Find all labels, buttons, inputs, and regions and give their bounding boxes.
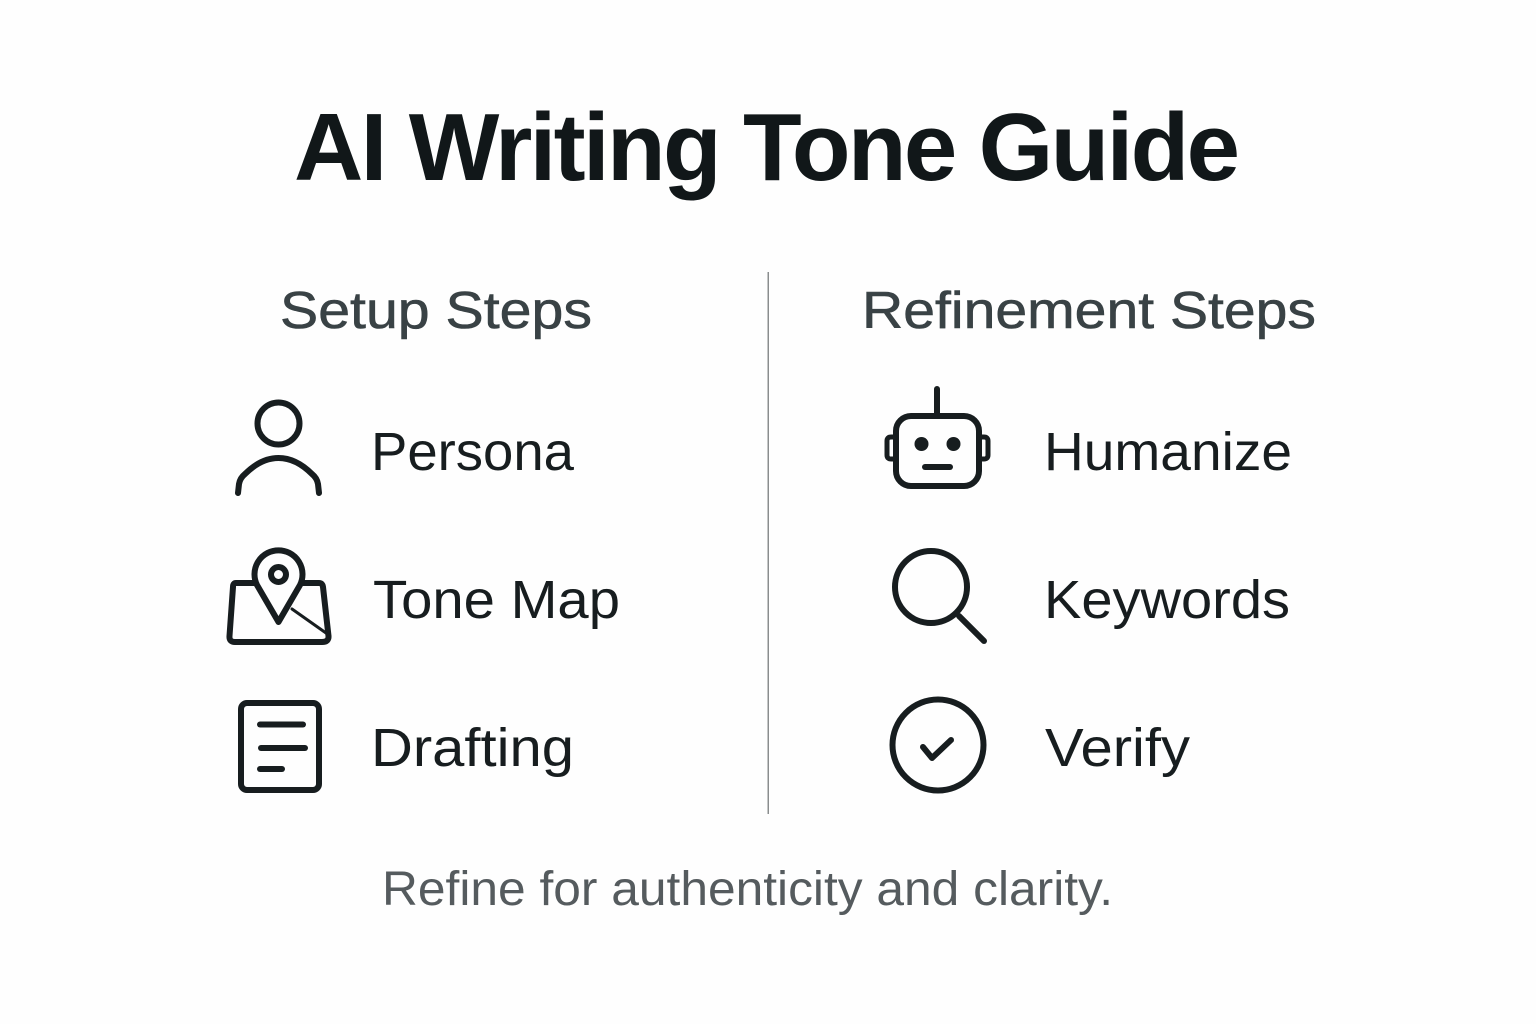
label: drafting: Drafting xyxy=(371,718,574,778)
icon: map with pin xyxy=(229,550,329,642)
icon: document xyxy=(241,703,319,790)
title: AI Writing Tone Guide xyxy=(294,94,1240,201)
icon: person xyxy=(238,402,319,493)
heading: setup steps: Setup Steps xyxy=(280,282,592,340)
label: humanize: Humanize xyxy=(1044,422,1292,482)
label: keywords: Keywords xyxy=(1044,570,1290,630)
label: persona: Persona xyxy=(371,422,575,482)
icon: robot xyxy=(887,389,988,486)
label: tone map: Tone Map xyxy=(373,570,620,630)
label: verify: Verify xyxy=(1045,718,1190,778)
icon: check circle xyxy=(892,700,984,790)
icon: magnifying glass xyxy=(895,551,984,641)
panel: refinement steps xyxy=(862,282,1316,790)
footer tagline: Refine for authenticity and clarity. xyxy=(382,863,1113,916)
panel: setup steps xyxy=(229,282,620,790)
heading: refinement steps: Refinement Steps xyxy=(862,282,1316,340)
